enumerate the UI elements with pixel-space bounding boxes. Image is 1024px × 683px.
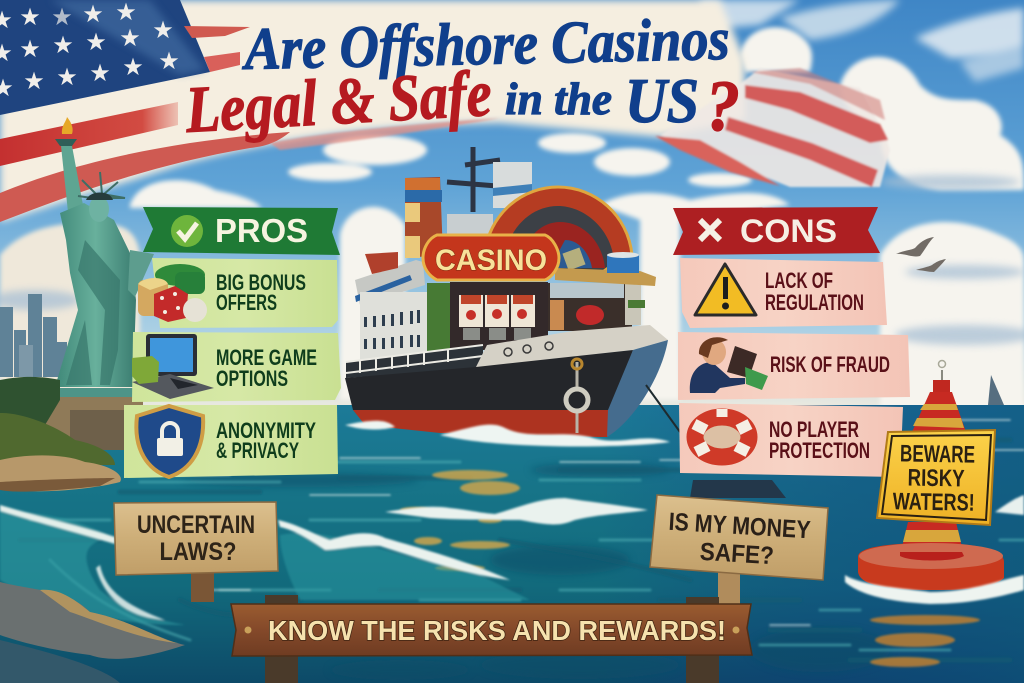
icon: life ring bbox=[688, 409, 756, 464]
pro: big bonus offers: BIG BONUS bbox=[216, 270, 306, 295]
uncertain text: LAWS? bbox=[160, 538, 236, 566]
flag stars bbox=[0, 0, 180, 102]
wave: middle crest foam bbox=[278, 520, 510, 580]
casino ship bbox=[345, 147, 680, 437]
trees back bbox=[0, 377, 60, 440]
buoy ring on top bbox=[941, 370, 943, 380]
buoy foam bbox=[845, 575, 1024, 604]
second top stripe bbox=[204, 52, 240, 72]
distant skyline bbox=[0, 294, 67, 377]
ship: deck blue strip bbox=[355, 275, 412, 302]
ship: casino sign: CASINO bbox=[435, 244, 547, 277]
pedestal stone bbox=[40, 397, 143, 450]
lower left stripe bbox=[0, 132, 290, 222]
icon: laptop bbox=[132, 334, 214, 399]
statue: crown spikes bbox=[78, 172, 125, 198]
flag stars: ★ bbox=[89, 60, 111, 87]
wave: left crest foam bbox=[0, 505, 115, 544]
tail stripe 2 bbox=[725, 117, 878, 187]
uncertain text: UNCERTAIN bbox=[137, 511, 255, 539]
statue: head bbox=[89, 196, 109, 222]
flag stars: ★ bbox=[19, 4, 41, 31]
con: risk of fraud bbox=[678, 332, 910, 400]
ship: white tower bbox=[493, 162, 532, 208]
pro: more game options: OPTIONS bbox=[216, 366, 288, 391]
statue: crown bbox=[86, 192, 113, 200]
pro: more game options: MORE GAME bbox=[216, 345, 317, 370]
canton sheen bbox=[50, 0, 205, 75]
beware inner border bbox=[882, 435, 991, 520]
flag stars: ★ bbox=[119, 25, 141, 52]
ship: railing bbox=[346, 345, 483, 378]
cons heading: CONS bbox=[740, 213, 837, 249]
clouds: high wisps bbox=[700, 0, 1024, 82]
left shore bbox=[0, 377, 185, 683]
ship: portholes bbox=[504, 342, 553, 356]
icon: fraudster with wallet bbox=[690, 337, 768, 393]
money post bbox=[718, 572, 740, 608]
ship: greenery bbox=[427, 283, 450, 355]
cons heading bbox=[673, 207, 880, 255]
panel: pros bbox=[124, 207, 341, 478]
buoy lower cone bbox=[900, 522, 964, 556]
ship: life ring and chain bbox=[566, 359, 588, 433]
ship: roulette wheel bbox=[483, 187, 632, 272]
statue: tablet bbox=[128, 250, 154, 297]
buoy base top bbox=[859, 543, 1003, 569]
statue: torch flame bbox=[62, 117, 73, 134]
wave: far right foam bbox=[995, 495, 1024, 515]
flag stars: ★ bbox=[158, 48, 180, 75]
pro: anonymity and privacy: & PRIVACY bbox=[216, 438, 299, 463]
banner posts bbox=[265, 595, 719, 683]
trees front bbox=[0, 413, 115, 465]
buoy reflection bbox=[870, 615, 980, 667]
pedestal top bbox=[47, 388, 138, 397]
tail top edge bbox=[750, 68, 885, 120]
ship: windows bbox=[364, 310, 420, 349]
submerged dark frame bbox=[690, 480, 786, 498]
pedestal shading bbox=[70, 410, 132, 450]
banner text: KNOW THE RISKS AND REWARDS! bbox=[268, 615, 726, 646]
background: sky bbox=[0, 0, 1024, 410]
uncertain post bbox=[191, 570, 214, 602]
pro: big bonus offers: OFFERS bbox=[216, 290, 277, 315]
tail stripe 3 bbox=[655, 136, 780, 186]
title bbox=[183, 6, 740, 147]
flag stars: ★ bbox=[56, 64, 78, 91]
buoy bbox=[845, 360, 1024, 667]
con: no player protection bbox=[679, 403, 903, 477]
clouds: shadows bbox=[0, 175, 1024, 345]
ship: blue cylinder bbox=[607, 252, 639, 273]
icon: shield with lock bbox=[136, 406, 203, 477]
pro: more game options bbox=[132, 332, 341, 402]
clouds: cumulus masses bbox=[0, 27, 1024, 410]
beware text: BEWARE bbox=[900, 440, 975, 469]
statue: torch bbox=[55, 139, 77, 146]
money text: IS MY MONEY bbox=[668, 508, 812, 544]
buoy lower gold stripe bbox=[903, 530, 961, 542]
flag stars: ★ bbox=[19, 36, 41, 63]
reflection of ship bbox=[400, 470, 520, 571]
title question mark: ? bbox=[706, 66, 740, 146]
pros heading: PROS bbox=[215, 212, 308, 249]
banner: know the risks and rewards bbox=[231, 595, 752, 683]
tail body bbox=[660, 68, 890, 187]
pros heading bbox=[143, 207, 340, 255]
ship: white bulwark bbox=[476, 325, 668, 367]
ship: anchor rope bbox=[646, 385, 680, 432]
sea bbox=[0, 405, 1024, 683]
statue of liberty bbox=[40, 117, 154, 450]
beware text: WATERS! bbox=[892, 488, 975, 517]
title in the: in the bbox=[505, 73, 612, 124]
wave: middle swell bbox=[280, 533, 530, 600]
ship: hull black bbox=[345, 350, 633, 410]
sign: is my money safe bbox=[650, 480, 828, 608]
sea streak texture bbox=[0, 420, 1024, 660]
ship wake bbox=[345, 421, 670, 446]
flag banner bbox=[0, 0, 890, 222]
ship: cabin bbox=[360, 292, 428, 362]
flag stars: ★ bbox=[82, 1, 104, 28]
statue: raised arm bbox=[61, 146, 83, 212]
banner nails bbox=[244, 626, 740, 634]
con: risk of fraud: RISK OF FRAUD bbox=[770, 352, 890, 377]
tail stripe 1 bbox=[745, 85, 888, 143]
ship: funnel bbox=[405, 177, 443, 258]
pro: anonymity and privacy bbox=[124, 405, 338, 478]
flag stars: ★ bbox=[152, 17, 174, 44]
lower-left rock sunlit bbox=[40, 590, 178, 643]
flag stars: ★ bbox=[23, 68, 45, 95]
seagulls bbox=[896, 237, 946, 272]
ship: bow blue bbox=[607, 340, 668, 437]
buoy base bbox=[858, 543, 1004, 590]
icon: dice and chips bbox=[138, 264, 207, 322]
banner board bbox=[231, 604, 752, 656]
ship: slot machines bbox=[459, 295, 535, 340]
rocks bbox=[0, 455, 121, 491]
distant sailboat bbox=[988, 375, 1004, 405]
buoy inner cone base bbox=[900, 552, 964, 560]
money board bbox=[650, 495, 828, 580]
flag canton bbox=[0, 0, 210, 115]
flag stars: ★ bbox=[85, 29, 107, 56]
sea right deep tint bbox=[600, 405, 1024, 683]
faded red under-edge bbox=[270, 118, 500, 150]
flag stars: ★ bbox=[51, 4, 73, 31]
icon: warning triangle bbox=[695, 264, 756, 315]
flag stripes left bbox=[0, 102, 178, 166]
ship: upper deck bbox=[355, 260, 425, 305]
wave: left swell bbox=[0, 510, 185, 625]
ship: red chest bbox=[365, 252, 398, 274]
ship: grey superstructure bbox=[447, 214, 493, 244]
sign: uncertain laws bbox=[114, 502, 278, 602]
large waves bbox=[0, 495, 1024, 625]
con: lack of regulation: LACK OF bbox=[765, 268, 833, 293]
ship: casino floor bbox=[450, 282, 548, 350]
sea dark blotches bbox=[180, 463, 890, 680]
beware text: RISKY bbox=[907, 465, 965, 493]
con: lack of regulation bbox=[680, 258, 887, 328]
lower-left rock bbox=[0, 582, 185, 659]
statue: robe folds bbox=[66, 240, 120, 385]
buoy eye bbox=[938, 360, 946, 368]
rock shadows bbox=[0, 478, 115, 492]
ship: mast bbox=[447, 147, 500, 212]
buoy cap bbox=[933, 380, 950, 392]
sign: beware risky waters bbox=[877, 430, 995, 525]
con: no player protection: PROTECTION bbox=[769, 438, 870, 463]
wave: left curl foam bbox=[96, 565, 165, 620]
con: no player protection: NO PLAYER bbox=[769, 417, 859, 442]
title line two red: Legal & Safe bbox=[183, 57, 493, 147]
pro: anonymity and privacy: ANONYMITY bbox=[216, 418, 316, 443]
bottom-left foam bbox=[0, 640, 120, 683]
ship: shop front bbox=[548, 283, 645, 331]
flag stars: ★ bbox=[122, 54, 144, 81]
wave: right crest foam bbox=[385, 498, 648, 524]
panel: cons bbox=[673, 207, 910, 477]
ship: awning bbox=[555, 268, 656, 286]
ship: rail bars bbox=[346, 345, 483, 373]
uncertain board bbox=[114, 502, 278, 575]
pro: big bonus offers bbox=[152, 258, 338, 328]
ship: casino sign bbox=[423, 235, 559, 280]
title US: US bbox=[625, 65, 699, 136]
statue: robe bbox=[55, 203, 136, 387]
buoy upper cone bbox=[912, 392, 966, 432]
banner cream body bbox=[0, 0, 745, 222]
con: lack of regulation: REGULATION bbox=[765, 290, 864, 315]
flag stars: ★ bbox=[52, 32, 74, 59]
ship: hull red bbox=[353, 410, 608, 437]
top stripes bbox=[184, 26, 250, 38]
buoy gold stripes bbox=[913, 404, 964, 428]
title line one: Are Offshore Casinos bbox=[240, 6, 730, 82]
right tail bbox=[655, 68, 890, 187]
money text: SAFE? bbox=[699, 538, 775, 570]
